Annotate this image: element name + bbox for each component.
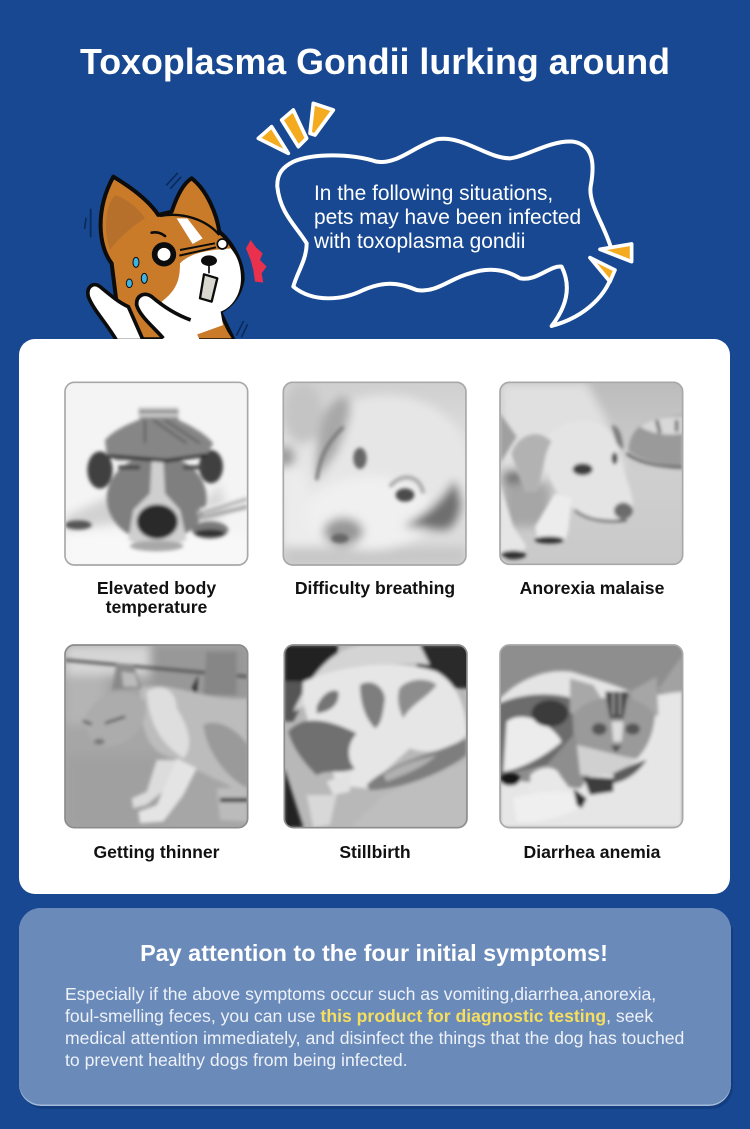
panel background	[19, 908, 733, 1109]
speech bubble with text	[277, 139, 613, 326]
nose and mouth	[200, 255, 217, 302]
bubble text	[313, 182, 581, 253]
paws	[88, 285, 200, 341]
photo: dog beside bowl	[500, 382, 683, 564]
heading: Pay attention to the four initial symptoms!	[140, 940, 608, 966]
icon: worried corgi	[85, 173, 267, 341]
label: Elevated body	[97, 578, 216, 598]
bubble text: with toxoplasma gondii	[313, 230, 525, 253]
body text: to prevent healthy dogs from being infected.	[65, 1050, 408, 1070]
photo: thin cat	[65, 645, 250, 828]
label	[97, 578, 216, 617]
body text: foul-smelling feces, you can use this product for diagnostic testing, seek	[65, 1006, 653, 1026]
label: Difficulty breathing	[295, 578, 455, 598]
panel: symptoms	[19, 339, 730, 894]
photo: sleepy labrador	[276, 382, 470, 567]
label: temperature	[106, 597, 208, 617]
photo: curled cat	[284, 645, 470, 828]
bubble text: pets may have been infected	[314, 206, 581, 229]
bubble text: In the following situations,	[314, 182, 553, 205]
label: Getting thinner	[93, 842, 220, 862]
label: Diarrhea anemia	[524, 842, 661, 862]
icon: yellow burst marks	[258, 103, 632, 282]
label: Stillbirth	[339, 842, 411, 862]
body text	[65, 984, 684, 1070]
photo: dog with ice bag	[65, 382, 248, 567]
body text: Especially if the above symptoms occur such as vomiting,diarrhea,anorexia,	[65, 984, 656, 1004]
panel: initial symptoms note	[19, 908, 733, 1109]
label: Anorexia malaise	[520, 578, 665, 598]
corgi head	[101, 177, 243, 339]
white panel background	[19, 339, 730, 894]
bubble outline	[277, 139, 613, 326]
eyes and brow	[152, 232, 227, 264]
photo: kitten in blanket	[500, 645, 683, 828]
red alarm mark	[246, 240, 267, 283]
sweat drops	[126, 257, 147, 288]
motion lines	[85, 173, 247, 337]
body text: medical attention immediately, and disinfect the things that the dog has touched	[65, 1028, 684, 1048]
title: Toxoplasma Gondii lurking around	[80, 42, 670, 82]
